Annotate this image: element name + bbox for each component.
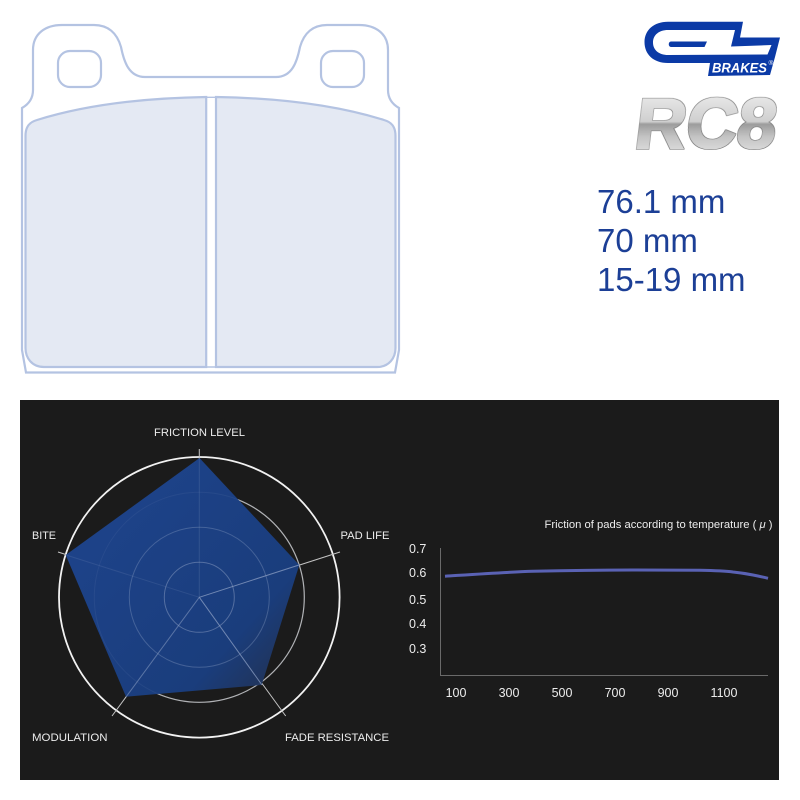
right mounting hole (321, 51, 364, 87)
friction line chart (409, 519, 772, 700)
radar value polygon (66, 458, 299, 697)
y axis values: 0.7 (409, 542, 426, 556)
x axis values: 900 (658, 686, 678, 700)
left mounting hole (58, 51, 101, 87)
brake pad diagram (22, 25, 399, 372)
friction curve (445, 570, 768, 578)
radar axis labels (32, 427, 390, 744)
x axis values: 700 (605, 686, 625, 700)
logo centre bar (669, 42, 707, 47)
label: bite: BITE (32, 530, 56, 542)
y axis values: 0.6 (409, 566, 426, 580)
height: 70 mm (597, 222, 698, 259)
RC8 product logo: RC8 (631, 84, 782, 164)
chart axes (440, 548, 768, 676)
x axis values (446, 686, 737, 700)
x axis values: 1100 (711, 686, 737, 700)
centre slot edges (206, 97, 216, 367)
label: friction level: FRICTION LEVEL (154, 427, 245, 439)
y axis values: 0.5 (409, 593, 426, 607)
x axis values: 500 (552, 686, 572, 700)
logo emblem (644, 22, 780, 76)
CL Brakes logo (644, 22, 780, 76)
radar chart (58, 449, 340, 738)
logo inner band (653, 30, 772, 55)
label: modulation: MODULATION (32, 732, 108, 744)
radar grid over polygon (66, 458, 304, 702)
chart title: Friction of pads according to temperature ( μ ) (544, 519, 772, 531)
thickness: 15-19 mm (597, 261, 746, 298)
y axis values (409, 542, 426, 656)
backing plate outline (22, 25, 399, 372)
y axis values: 0.3 (409, 642, 426, 656)
friction material right block (216, 97, 396, 367)
friction material left block (26, 97, 206, 367)
length: 76.1 mm (597, 183, 725, 220)
outer ring (59, 457, 340, 738)
label: pad life: PAD LIFE (340, 530, 390, 542)
registered mark: ® (768, 59, 774, 67)
logo wordmark: BRAKES (712, 60, 767, 76)
y axis values: 0.4 (409, 617, 426, 631)
x axis values: 100 (446, 686, 466, 700)
label: fade resistance: FADE RESISTANCE (285, 732, 389, 744)
panel: performance charts (20, 400, 779, 780)
pad dimensions (597, 183, 746, 298)
x axis values: 300 (499, 686, 519, 700)
